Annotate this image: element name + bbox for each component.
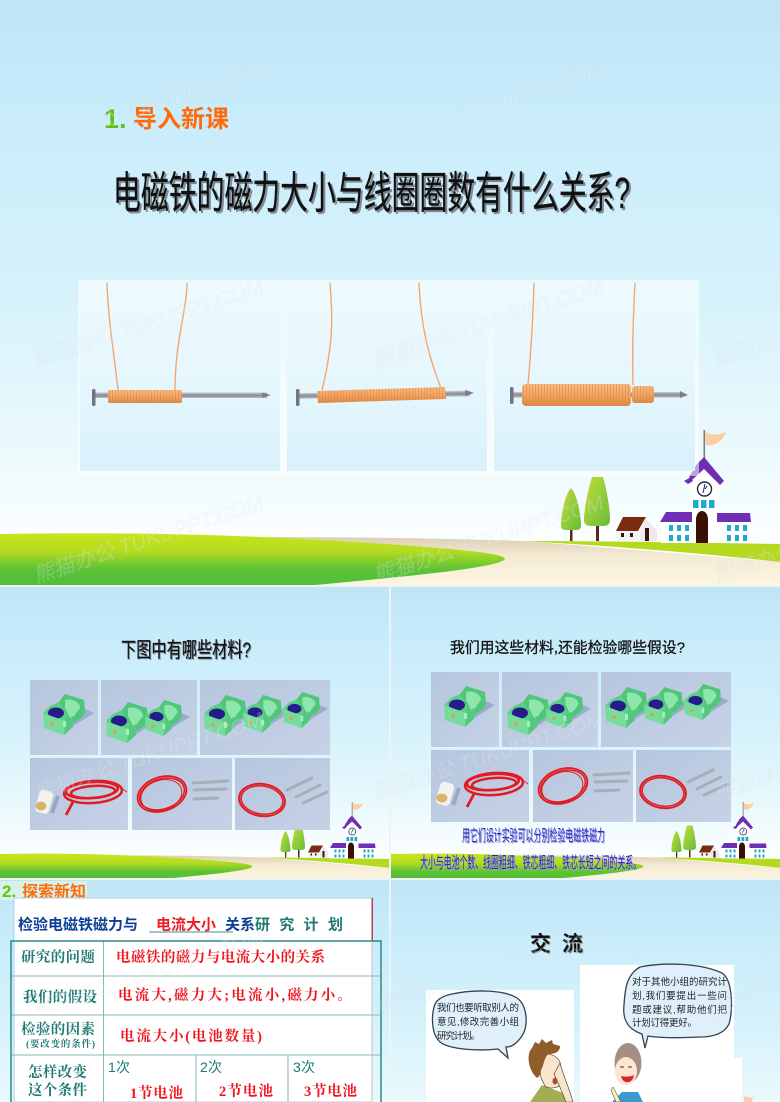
watermark: repeated TUKUPPT marks: 熊猫办公 TUKUPPT.COM — [30, 275, 267, 372]
speech bubble: right: 计划订得更好。 — [632, 1017, 697, 1029]
heading: plan title: 检验电磁铁磁力与 — [18, 916, 138, 934]
speech bubble: left: 研究计划。 — [437, 1030, 480, 1042]
heading: section 1: 1. — [104, 104, 127, 134]
row labels: 我们的假设 — [23, 988, 98, 1006]
table: research plan — [11, 941, 381, 1102]
text block: blue conclusion: 用它们设计实验可以分别检验电磁铁磁力 — [462, 827, 605, 845]
watermark: repeated TUKUPPT marks: 熊猫办公 TUKUPPT.COM — [30, 708, 267, 805]
row labels: 怎样改变 — [28, 1063, 88, 1081]
heading: section 1: 导入新课 — [133, 106, 229, 133]
title: other hypotheses: 我们用这些材料,还能检验哪些假设? — [450, 640, 685, 656]
speech bubble: left: 我们也要听取别人的 — [437, 1002, 519, 1014]
row labels: 这个条件 — [28, 1081, 88, 1099]
text block: blue conclusion — [420, 827, 641, 872]
trial labels: 3次 — [293, 1059, 315, 1075]
title: what materials: 下图中有哪些材料? — [121, 639, 251, 662]
speech bubble: left: 意见,修改完善小组 — [437, 1016, 519, 1028]
speech bubble: right — [624, 964, 731, 1048]
trial labels — [108, 1059, 315, 1075]
panel: three nail photographs — [78, 280, 699, 476]
row labels: (要改变的条件) — [26, 1038, 95, 1050]
heading: plan title: 研 究 计 划 — [255, 916, 343, 934]
heading: plan title: 关系 — [225, 916, 255, 934]
scene: hill, road, trees, house and school — [0, 430, 780, 585]
heading: section 2: 探索新知 — [22, 882, 86, 901]
row labels: 检验的因素 — [21, 1020, 96, 1038]
watermark: repeated TUKUPPT marks: 熊猫办公 TUKUPPT.COM — [30, 491, 267, 588]
row answers in red: 1节电池 — [130, 1084, 184, 1102]
heading: section 2 — [0, 881, 87, 901]
row answers in red: 电流大小(电池数量) — [120, 1027, 262, 1045]
row labels: 研究的问题 — [21, 948, 96, 966]
man — [529, 1039, 573, 1102]
watermark: repeated TUKUPPT marks: 熊猫办公 TUKUPPT.COM — [370, 925, 607, 1022]
watermark: repeated TUKUPPT marks: 熊猫办公 TUKUPPT.COM — [370, 708, 607, 805]
woman — [611, 1043, 643, 1102]
heading: section 1 — [104, 104, 229, 134]
photo grid: batteries, wires and nails — [30, 680, 330, 830]
heading: plan title — [18, 916, 343, 934]
scene: small landscape — [391, 802, 780, 880]
panel: slide 5 discussion — [391, 880, 780, 1102]
photo grid: batteries, wires and nails — [431, 672, 731, 822]
panel: slide 2 materials — [0, 587, 389, 878]
row answers in red: 电流大,磁力大;电流小,磁力小。 — [118, 986, 352, 1004]
panel: paper sheet — [14, 898, 373, 1102]
watermark: repeated TUKUPPT marks: 熊猫办公 TUKUPPT.COM — [370, 275, 607, 372]
illustration: left speaker — [426, 990, 574, 1102]
watermark: repeated TUKUPPT marks: 熊猫办公 TUKUPPT.COM — [30, 925, 267, 1022]
watermark: repeated TUKUPPT marks: 熊猫办公 TUKUPPT.COM — [30, 58, 267, 155]
panel: slide 4 research plan — [0, 880, 389, 1102]
flag fragment of the school scene — [744, 1096, 753, 1102]
speech bubble: left — [432, 991, 526, 1058]
speech bubble: right: 题或建议,帮助他们把 — [632, 1004, 727, 1016]
row answers in red: 2节电池 — [219, 1082, 274, 1100]
panel: slide 1 lead-in — [0, 0, 780, 585]
row labels — [21, 948, 98, 1099]
watermark: repeated TUKUPPT marks: 熊猫办公 TUKUPPT.COM — [370, 58, 607, 155]
panel: slide 3 other hypotheses — [391, 587, 780, 878]
heading: plan title: 电流大小 — [156, 916, 216, 934]
speech bubble: right: 划,我们要提出一些问 — [632, 990, 727, 1002]
watermark: repeated TUKUPPT marks: 熊猫办公 TUKUPPT.COM — [370, 491, 607, 588]
scene: small landscape — [0, 802, 390, 880]
trial labels: 2次 — [200, 1059, 222, 1075]
heading: section 2: 2. — [2, 882, 16, 901]
speech bubble: right: 对于其他小组的研究计 — [632, 976, 727, 988]
illustration: right speaker — [580, 964, 742, 1102]
row answers in red: 3节电池 — [304, 1082, 358, 1100]
title: discussion: 交 流 — [530, 932, 583, 956]
row answers in red: 电磁铁的磁力与电流大小的关系 — [116, 948, 326, 966]
trial labels: 1次 — [108, 1059, 130, 1075]
photo: nail with more coil turns — [287, 283, 487, 471]
photo: nail with few coil turns — [80, 283, 280, 471]
row answers in red — [116, 948, 358, 1102]
photo: nail with most coil turns — [494, 283, 695, 471]
